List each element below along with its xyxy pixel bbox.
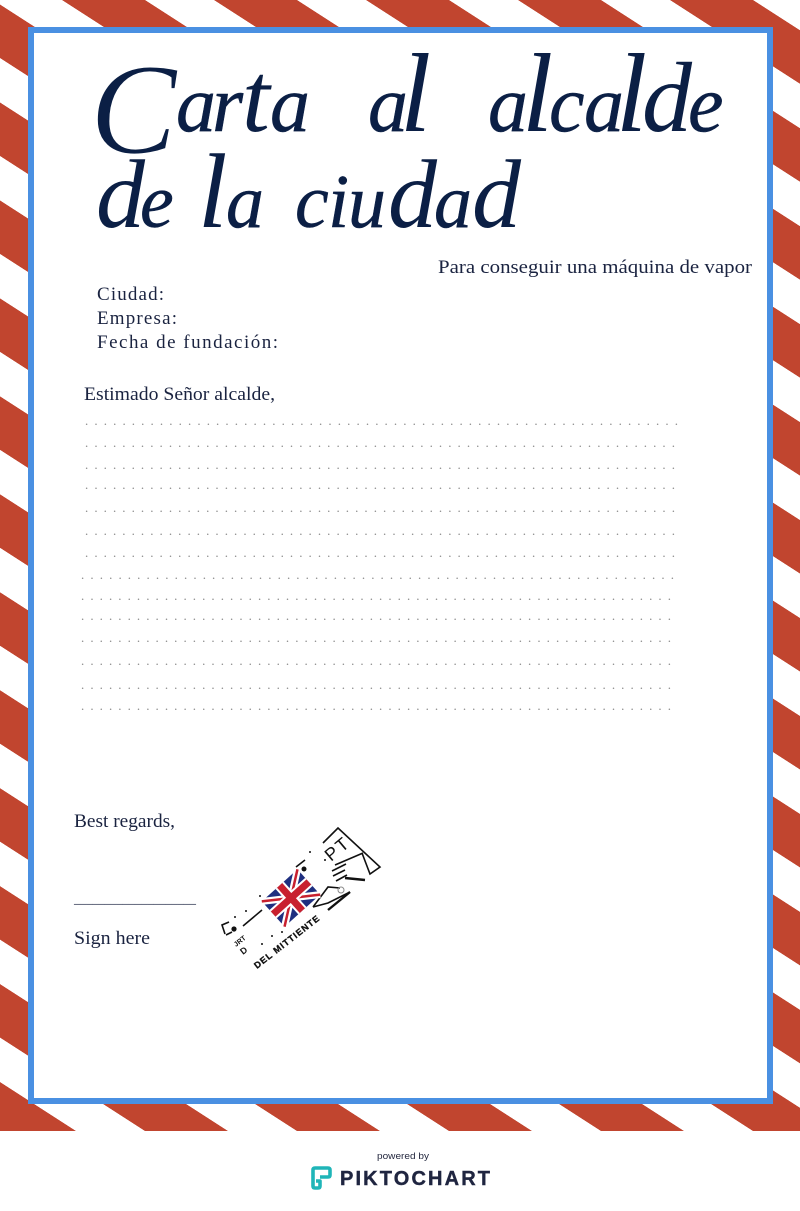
dotted writing lines: . . . . . . . . . . . . . . . . . . . . . . . . . . . . . . . . . . . . . . . . . . . . . . . . . . . . . . . . . . . . . . . .: [85, 413, 678, 428]
form fields: Ciudad:: [97, 284, 164, 305]
title: d: [472, 141, 522, 249]
title: a: [488, 61, 528, 149]
title: a: [226, 160, 264, 244]
dotted writing lines: . . . . . . . . . . . . . . . . . . . . . . . . . . . . . . . . . . . . . . . . . . . . . . . . . . . . . . . . . . . . . . . .: [81, 588, 671, 603]
title: t: [242, 42, 272, 153]
dotted writing lines: . . . . . . . . . . . . . . . . . . . . . . . . . . . . . . . . . . . . . . . . . . . . . . . . . . . . . . . . . . . . . . . .: [81, 653, 671, 668]
dotted writing lines: . . . . . . . . . . . . . . . . . . . . . . . . . . . . . . . . . . . . . . . . . . . . . . . . . . . . . . . . . . . . . . . .: [85, 477, 675, 492]
title: C: [90, 38, 178, 182]
stamp small marks: [231, 851, 326, 945]
dotted writing lines: . . . . . . . . . . . . . . . . . . . . . . . . . . . . . . . . . . . . . . . . . . . . . . . . . . . . . . . . . . . . . . . .: [85, 500, 675, 515]
stamp flag: [262, 869, 320, 927]
title: c: [549, 61, 585, 149]
form fields: Empresa:: [97, 308, 177, 329]
dotted writing lines: . . . . . . . . . . . . . . . . . . . . . . . . . . . . . . . . . . . . . . . . . . . . . . . . . . . . . . . . . . . . . . . .: [85, 457, 675, 472]
title: e: [140, 160, 174, 244]
dotted writing lines: [81, 413, 678, 713]
salutation: Estimado Señor alcalde,: [84, 384, 275, 405]
dotted writing lines: . . . . . . . . . . . . . . . . . . . . . . . . . . . . . . . . . . . . . . . . . . . . . . . . . . . . . . . . . . . . . . . .: [85, 435, 675, 450]
dotted writing lines: . . . . . . . . . . . . . . . . . . . . . . . . . . . . . . . . . . . . . . . . . . . . . . . . . . . . . . . . . . . . . . . .: [81, 608, 671, 623]
stamp caption: DEL MITTIENTE: [252, 913, 321, 971]
title: a: [368, 61, 408, 149]
title: a: [176, 61, 216, 149]
title: d: [642, 42, 693, 153]
stamp PT mark: PT: [321, 832, 354, 865]
dotted writing lines: . . . . . . . . . . . . . . . . . . . . . . . . . . . . . . . . . . . . . . . . . . . . . . . . . . . . . . . . . . . . . . . .: [85, 545, 675, 560]
title: u: [348, 160, 386, 244]
title: d: [96, 141, 146, 249]
title: [90, 32, 724, 250]
title: r: [212, 61, 244, 149]
title: l: [522, 32, 553, 156]
signature line: ____________________: [73, 892, 197, 907]
dotted writing lines: . . . . . . . . . . . . . . . . . . . . . . . . . . . . . . . . . . . . . . . . . . . . . . . . . . . . . . . . . . . . . . . .: [81, 698, 671, 713]
subtitle: Para conseguir una máquina de vapor: [438, 257, 753, 278]
title: l: [400, 32, 431, 156]
stamp fragment letters: JRT: [233, 934, 248, 949]
dotted writing lines: . . . . . . . . . . . . . . . . . . . . . . . . . . . . . . . . . . . . . . . . . . . . . . . . . . . . . . . . . . . . . . . .: [85, 523, 675, 538]
dotted writing lines: . . . . . . . . . . . . . . . . . . . . . . . . . . . . . . . . . . . . . . . . . . . . . . . . . . . . . . . . . . . . . . . .: [81, 677, 671, 692]
icon: piktochart logo: [313, 1168, 330, 1188]
closing: Best regards,: [74, 811, 175, 832]
form fields: Fecha de fundación:: [97, 332, 278, 353]
title: e: [688, 61, 724, 149]
title: l: [616, 32, 647, 156]
title: d: [388, 141, 438, 249]
title: a: [270, 61, 310, 149]
powered by label: powered by: [377, 1151, 429, 1162]
signature label: Sign here: [74, 928, 150, 949]
title: a: [584, 61, 624, 149]
form fields: [97, 284, 278, 353]
piktochart wordmark: PIKTOCHART: [340, 1168, 490, 1190]
dotted writing lines: . . . . . . . . . . . . . . . . . . . . . . . . . . . . . . . . . . . . . . . . . . . . . . . . . . . . . . . . . . . . . . . .: [81, 567, 674, 582]
title: l: [198, 133, 227, 250]
title: a: [434, 160, 472, 244]
title: i: [328, 160, 349, 244]
stamp fragment initial: D: [238, 944, 250, 957]
title: c: [295, 160, 329, 244]
icon: UK postage stamp: [222, 828, 380, 971]
stamp frame marks: [222, 828, 380, 935]
dotted writing lines: . . . . . . . . . . . . . . . . . . . . . . . . . . . . . . . . . . . . . . . . . . . . . . . . . . . . . . . . . . . . . . . .: [81, 630, 671, 645]
